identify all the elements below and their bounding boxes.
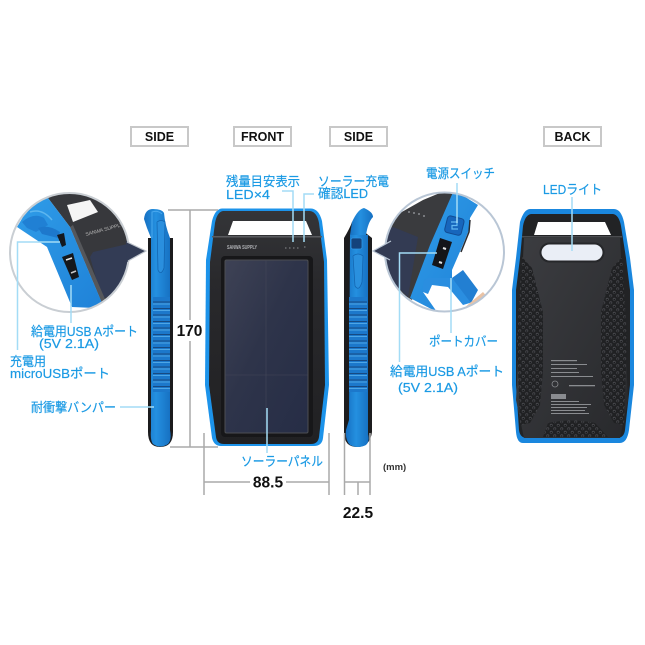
label: USB A port right: 給電用USB Aポート	[390, 364, 504, 379]
label: power switch: 電源スイッチ	[426, 166, 495, 181]
back bumper	[512, 209, 634, 443]
unit label: (mm)	[383, 462, 406, 473]
dimension: depth 22.5	[343, 433, 373, 522]
leader lines	[18, 183, 572, 453]
label: USB A port left	[31, 324, 138, 351]
label: remaining charge LEDs	[226, 174, 300, 202]
device: left side view	[144, 209, 173, 447]
handle hole	[228, 221, 312, 235]
label: microUSB port: 充電用	[10, 354, 46, 369]
dotted grip right	[601, 257, 627, 425]
label: solar charge LED	[318, 174, 389, 201]
close-up bumper	[410, 190, 478, 312]
label: BACK: BACK	[554, 130, 591, 144]
device: front view	[205, 208, 329, 446]
label: solar panel: ソーラーパネル	[241, 454, 323, 469]
close-up body	[48, 194, 127, 302]
label: USB A port right	[390, 364, 504, 395]
power switch	[444, 215, 465, 236]
port cover	[423, 278, 473, 305]
callout: left port close-up: SANWA SUPPLY	[85, 222, 124, 238]
brand print: SANWA SUPPLY	[227, 245, 257, 251]
label: SIDE: SIDE	[145, 130, 174, 144]
LED dots	[285, 247, 306, 248]
dimension: depth 22.5: 22.5	[343, 505, 373, 522]
label: solar charge LED: 確認LED	[318, 186, 368, 201]
handle opening	[534, 222, 611, 235]
label: shock bumper: 耐衝撃バンパー	[31, 400, 116, 415]
label: BACK	[544, 127, 601, 146]
device: back view	[512, 209, 634, 443]
label: SIDE right	[330, 127, 387, 146]
callout: right port close-up	[373, 190, 504, 312]
callout: left port close-up	[10, 190, 146, 320]
rating print	[551, 360, 595, 414]
label: USB A port left: (5V 2.1A)	[39, 336, 99, 351]
LED light	[540, 244, 604, 262]
label: port cover: ポートカバー	[429, 334, 498, 349]
back body	[516, 214, 630, 438]
label: remaining charge LEDs: LED×4	[226, 187, 270, 202]
label: remaining charge LEDs: 残量目安表示	[226, 174, 300, 189]
label: microUSB port: microUSBポート	[10, 366, 110, 381]
dimension: width 88.5	[204, 433, 329, 495]
usb port	[432, 238, 452, 269]
bottom dotted grip	[543, 420, 608, 437]
body	[209, 211, 325, 444]
label: solar charge LED: ソーラー充電	[318, 174, 389, 189]
label: SIDE	[131, 127, 188, 146]
dimension: height 170	[168, 210, 218, 447]
panel frame	[221, 256, 313, 437]
device: right side view	[344, 208, 373, 447]
bumper outline	[205, 208, 329, 446]
label: LED light: LEDライト	[543, 182, 602, 197]
label: USB A port right: (5V 2.1A)	[398, 380, 458, 395]
label: FRONT: FRONT	[241, 130, 284, 144]
dimension: width 88.5: 88.5	[253, 474, 283, 492]
dotted grip left	[517, 257, 543, 425]
label: USB A port left: 給電用USB Aポート	[31, 324, 138, 339]
label: SIDE right: SIDE	[344, 130, 373, 144]
label: FRONT	[234, 127, 291, 146]
center plate	[516, 238, 628, 438]
close-up body	[391, 194, 452, 300]
solar panel	[225, 260, 308, 433]
label: microUSB port	[10, 354, 110, 381]
dimension: height 170: 170	[177, 323, 202, 340]
